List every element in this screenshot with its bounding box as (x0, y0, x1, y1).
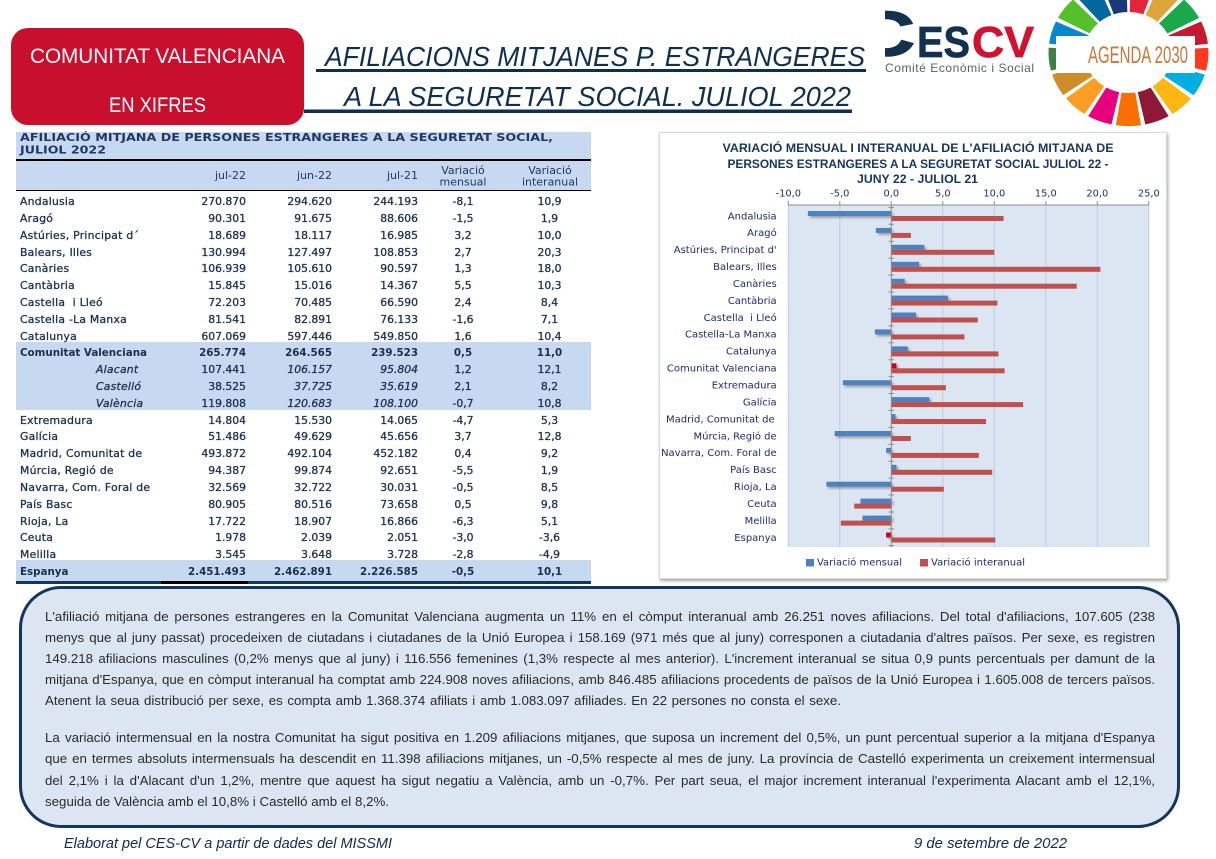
category labels: Balears, Illes (713, 262, 777, 273)
title (304, 41, 866, 113)
row: Cantàbria: 10,3 (537, 279, 562, 292)
row: València: 108.100 (373, 397, 418, 410)
category labels: Comunitat Valenciana (667, 364, 777, 375)
title: AFILIACIONS MITJANES P. ESTRANGERES (323, 41, 866, 72)
row: Galícia: 3,7 (454, 430, 472, 443)
row: València: València (96, 397, 143, 410)
row: País Basc: 9,8 (541, 498, 558, 511)
table title band: AFILIACIÓ MITJANA DE PERSONES ESTRANGERES A LA SEGURETAT SOCIAL, (20, 131, 553, 144)
row: Galícia: 12,8 (537, 430, 562, 443)
row: Galícia: Galícia (20, 430, 58, 443)
footer: date: 9 de setembre de 2022 (914, 835, 1068, 852)
row: Múrcia: 92.651 (380, 464, 418, 477)
row: Cantàbria: Cantàbria (20, 279, 75, 292)
category labels: Galícia (743, 396, 777, 408)
category labels: Navarra, Com. Foral de (661, 448, 777, 459)
row: Extremadura: 5,3 (541, 414, 558, 427)
row: Múrcia: 94.387 (208, 464, 246, 477)
legend: Variació mensual (817, 556, 902, 568)
row: Balears (20, 246, 562, 259)
row: Canàries: 1,3 (454, 262, 472, 275)
row: Ceuta: 1.978 (215, 531, 246, 544)
row: Extremadura: Extremadura (20, 414, 93, 427)
x axis labels: 5,0 (935, 188, 951, 200)
row: Galícia: 45.656 (380, 430, 418, 443)
row: Catalunya: 597.446 (287, 330, 332, 343)
row: Aragó: Aragó (20, 212, 53, 225)
row: Melilla: 3.648 (301, 548, 332, 561)
row: Canàries: 90.597 (380, 262, 418, 275)
row: Extremadura: 15.530 (294, 414, 332, 427)
row: Espanya (20, 566, 562, 578)
row: Cantàbria: 15.016 (294, 279, 332, 292)
row: Andalusia (20, 195, 562, 208)
category labels: Rioja, La (734, 482, 777, 493)
row: Madrid: 493.872 (201, 447, 246, 460)
logo: CES CV: CV (972, 18, 1035, 67)
row: Cantàbria (20, 279, 562, 292)
text: C (853, 0, 915, 70)
row: Galícia: 51.486 (208, 430, 246, 443)
row: Balears: 2,7 (454, 246, 472, 259)
category labels: Extremadura (712, 380, 777, 392)
row: València (96, 397, 562, 410)
row: Rioja: -6,3 (452, 515, 474, 528)
row: Alacant: 107.441 (201, 363, 246, 376)
text block: paragraph 1: Atenent la seua distribució per sexe, es compta amb 1.368.374 afiliats i amb 1.083.097 afiliades. En 22 persones no consta el sexe. (45, 693, 841, 708)
row: Navarra: Navarra, Com. Foral de (20, 481, 150, 494)
logo: Agenda 2030 wheel (1048, 0, 1208, 126)
row: Múrcia: 1,9 (541, 464, 558, 477)
row: Extremadura (20, 414, 558, 427)
row: Castella i Lleó: Castella i Lleó (20, 296, 103, 309)
row: Castella-La Manxa: 81.541 (208, 313, 246, 326)
table rows (20, 195, 562, 578)
row: Madrid: Madrid, Comunitat de (20, 447, 142, 460)
row: Madrid (20, 447, 558, 460)
row: Balears: 20,3 (537, 246, 562, 259)
row: Alacant (95, 363, 562, 376)
category labels: Madrid, Comunitat de (666, 414, 775, 425)
category labels: Ceuta (747, 499, 777, 510)
row: Astúries: 18.689 (208, 229, 246, 242)
row: Castella i Lleó (20, 296, 558, 309)
row: Cantàbria: 5,5 (454, 279, 472, 292)
text block: paragraph 2: del 2,1% i la d'Alacant d'un 1,2%, mentre que aquest ha sigut negatiu a València, amb un -0,7%. Per part seua, el major increment interanual l'experimenta Alacant amb el 12,1%, (45, 772, 1155, 788)
category labels (661, 211, 777, 544)
row: Balears: 127.497 (287, 246, 332, 259)
row: Alacant: 12,1 (537, 363, 562, 376)
chart title: VARIACIÓ MENSUAL I INTERANUAL DE L'AFILIACIÓ MITJANA DE (722, 141, 1114, 155)
row: Astúries (20, 229, 562, 242)
category labels: Espanya (734, 533, 777, 544)
row: Espanya: Espanya (20, 566, 68, 578)
row: Comunitat Valenciana: 239.523 (371, 347, 418, 359)
category labels: País Basc (730, 464, 777, 476)
text block: paragraph 2: que en termes absoluts intermensuals ha descendit en 11.398 afiliacions mitjanes, un -0,5% respecte al mes de juny. La província de Castelló experimenta un creixement intermensual (45, 751, 1155, 766)
row: València: 120.683 (287, 397, 332, 410)
panel: text commentary (19, 586, 1180, 828)
table header: mensual (440, 176, 486, 188)
row: Astúries: 3,2 (454, 229, 472, 242)
row: Canàries: 105.610 (287, 262, 332, 275)
row: Múrcia: Múrcia, Regió de (20, 464, 114, 477)
row: Catalunya: 1,6 (454, 330, 472, 343)
row: Canàries: 106.939 (201, 262, 246, 275)
table header: jun-22 (296, 169, 332, 182)
table header: jul-21 (386, 169, 418, 182)
row: Comunitat Valenciana (20, 347, 562, 359)
chart title: JUNY 22 - JULIOL 21 (857, 172, 978, 186)
row: Rioja: 17.722 (208, 515, 246, 528)
row: Espanya: 2.451.493 (188, 566, 246, 578)
row: Catalunya: Catalunya (20, 330, 77, 343)
row: València: -0,7 (452, 397, 474, 410)
row: Melilla: -2,8 (452, 548, 474, 561)
row: Alacant: 1,2 (454, 363, 472, 376)
row: Rioja: 5,1 (541, 515, 558, 528)
row: Andalusia: 294.620 (287, 195, 332, 208)
row: Castella i Lleó: 72.203 (208, 296, 246, 309)
row: Galícia (20, 430, 562, 443)
row: Melilla (20, 548, 560, 561)
row: Melilla: Melilla (20, 548, 56, 561)
x axis labels (776, 188, 1160, 200)
row: Catalunya (20, 330, 562, 343)
row: Aragó (20, 212, 558, 225)
row: Andalusia: 244.193 (373, 195, 418, 208)
row: Castelló: 38.525 (208, 380, 246, 393)
row: Navarra: 32.569 (208, 481, 246, 494)
row: Múrcia: -5,5 (452, 464, 474, 477)
row: Múrcia (20, 464, 558, 477)
row: Castella-La Manxa: -1,6 (452, 313, 474, 326)
x axis labels: 0,0 (884, 188, 899, 200)
row: Astúries: 16.985 (380, 229, 418, 242)
row: Espanya: 2.226.585 (360, 566, 418, 578)
row: Cantàbria: 14.367 (380, 279, 418, 292)
row: Castelló: 35.619 (380, 380, 418, 393)
row: Astúries: 18.117 (294, 229, 332, 242)
row: Castella i Lleó: 2,4 (454, 296, 472, 309)
row: Castella i Lleó: 8,4 (541, 296, 558, 309)
row: Extremadura: 14.065 (380, 414, 418, 427)
table header: jul-22 (214, 169, 246, 182)
category labels: Astúries, Principat d' (674, 244, 777, 256)
row: Castella-La Manxa: Castella -La Manxa (20, 313, 127, 326)
bars: variació mensual (808, 211, 948, 538)
row: Ceuta: 2.039 (301, 531, 332, 544)
category labels: Canàries (733, 278, 777, 290)
x axis labels: -10,0 (776, 188, 801, 200)
category labels: Melilla (745, 516, 777, 527)
row: Ceuta: -3,6 (539, 531, 560, 544)
row: València: 119.808 (201, 397, 246, 410)
row: Canàries: 18,0 (537, 262, 562, 275)
row: Navarra: -0,5 (452, 481, 474, 494)
row: Catalunya: 549.850 (373, 330, 418, 343)
footer: source: Elaborat pel CES-CV a partir de dades del MISSMI (64, 835, 392, 852)
x axis labels: 15,0 (1035, 188, 1057, 200)
chart title (722, 141, 1114, 186)
row: Navarra: 32.722 (294, 481, 332, 494)
row: Alacant: 106.157 (287, 363, 332, 376)
row: Comunitat Valenciana: 265.774 (199, 347, 246, 359)
panel: bar chart (659, 132, 1167, 579)
row: Comunitat Valenciana: 11,0 (537, 347, 562, 359)
row: Comunitat Valenciana: 264.565 (285, 347, 332, 359)
logo: CES CV: Comité Econòmic i Social (885, 61, 1034, 75)
text block: paragraph 2: seguida de València amb el 10,8% i Castelló amb el 8,2%. (45, 794, 389, 808)
legend: Variació interanual (931, 556, 1025, 568)
row: Castelló: 37.725 (294, 380, 332, 393)
row: Rioja: 16.866 (380, 515, 418, 528)
row: Rioja (20, 515, 558, 528)
row: Navarra: 30.031 (380, 481, 418, 494)
row: Navarra (20, 481, 558, 494)
row: Madrid: 0,4 (454, 447, 472, 460)
band: Comunitat Valenciana (16, 342, 591, 410)
table header: Variació (441, 164, 485, 177)
row: Melilla: 3.728 (387, 548, 418, 561)
text block: paragraph 1: 149.218 afiliacions masculines (0,2% menys que al juny) i 116.556 femenines (1,3% respecte al mes anterior). L'increment interanual se situa 0,9 punts percentuals per damunt de la (45, 651, 1155, 666)
x axis labels: 20,0 (1086, 188, 1108, 200)
band: Espanya (16, 560, 591, 581)
category labels: Aragó (747, 227, 777, 239)
text block: paragraph 1 (45, 609, 1155, 708)
badge: Comunitat Valenciana en xifres (11, 28, 304, 125)
chart plot area (788, 201, 1149, 547)
row: Balears: 108.853 (373, 246, 418, 259)
category labels: Múrcia, Regió de (693, 430, 777, 442)
x axis labels: 10,0 (983, 188, 1005, 200)
category labels: Catalunya (726, 347, 777, 358)
row: Balears: Balears, Illes (20, 246, 92, 259)
row: País Basc: 73.658 (380, 498, 418, 511)
x axis labels: -5,0 (830, 188, 849, 200)
row: Melilla: -4,9 (539, 548, 560, 561)
bars: variació interanual (841, 216, 1100, 542)
row: Andalusia: 10,9 (537, 195, 562, 208)
text block: paragraph 2: La variació intermensual en la nostra Comunitat ha sigut positiva en 1.209 afiliacions mitjanes, que suposa un increment del 0,5%, un punt percentual superior a la mitjana d'Espanya (45, 730, 1155, 745)
row: Ceuta: 2.051 (387, 531, 418, 544)
table header: interanual (522, 176, 578, 188)
row: País Basc: 80.905 (208, 498, 246, 511)
row: Espanya: 2.462.891 (274, 566, 332, 578)
row: Andalusia: Andalusia (20, 195, 75, 208)
text block: paragraph 1: mitjana d'Espanya, que en còmput interanual ha comptat amb 224.908 noves afiliacions, amb 846.485 afiliacions procedents de països de la Unió Europea i 1.605.008 de tercers països. (45, 672, 1155, 687)
panel: table (16, 131, 591, 584)
row: Catalunya: 10,4 (537, 330, 562, 343)
row: Extremadura: 14.804 (208, 414, 246, 427)
row: Andalusia: -8,1 (452, 195, 474, 208)
row: Cantàbria: 15.845 (208, 279, 246, 292)
row: Rioja: 18.907 (294, 515, 332, 528)
row: Castelló: 2,1 (454, 380, 472, 393)
row: Madrid: 452.182 (373, 447, 418, 460)
category labels: Castella-La Manxa (685, 330, 777, 341)
row: Castelló: Castelló (96, 380, 141, 393)
row: València: 10,8 (537, 397, 562, 410)
row: Canàries: Canàries (20, 262, 69, 275)
row: Comunitat Valenciana: 0,5 (454, 347, 472, 359)
logo: CES CV (885, 10, 1035, 75)
row: País Basc: 0,5 (454, 498, 472, 511)
row: Ceuta (20, 531, 560, 544)
row: Catalunya: 607.069 (201, 330, 246, 343)
row: Castelló: 8,2 (541, 380, 558, 393)
table bottom rule (16, 581, 591, 584)
row: Múrcia: 99.874 (294, 464, 332, 477)
row: Castella i Lleó: 66.590 (380, 296, 418, 309)
row: Astúries: 10,0 (537, 229, 562, 242)
row: Madrid: 9,2 (541, 447, 558, 460)
row: Aragó: 90.301 (208, 212, 246, 225)
category labels: Cantàbria (728, 295, 777, 307)
row: Aragó: 91.675 (294, 212, 332, 225)
row: Ceuta: -3,0 (452, 531, 474, 544)
row: Navarra: 8,5 (541, 481, 558, 494)
row: Espanya: 10,1 (537, 566, 562, 578)
row: País Basc: País Basc (20, 498, 73, 511)
x axis labels: 25,0 (1138, 188, 1160, 200)
row: Melilla: 3.545 (215, 548, 246, 561)
row: Andalusia: 270.870 (201, 195, 246, 208)
row: Aragó: -1,5 (452, 212, 474, 225)
table header: Variació (528, 164, 572, 177)
text block: paragraph 2 (45, 730, 1155, 808)
row: País Basc (20, 498, 558, 511)
row: Aragó: 1,9 (541, 212, 558, 225)
logo: CES CV: ES (917, 18, 970, 67)
row: Espanya: -0,5 (452, 566, 474, 578)
row: Alacant: 95.804 (380, 363, 418, 376)
category labels: Andalusia (728, 211, 777, 222)
table title band (16, 132, 591, 159)
legend (806, 556, 1025, 568)
table title band: JULIOL 2022 (19, 144, 106, 156)
title: A LA SEGURETAT SOCIAL. JULIOL 2022 (342, 81, 851, 112)
row: Extremadura: -4,7 (452, 414, 474, 427)
row: Galícia: 49.629 (294, 430, 332, 443)
badge: Comunitat Valenciana en xifres: COMUNITAT VALENCIANA (30, 45, 285, 68)
row: Madrid: 492.104 (287, 447, 332, 460)
row: Castella-La Manxa: 7,1 (541, 313, 558, 326)
row: Rioja: Rioja, La (20, 515, 68, 528)
row: Astúries: Astúries, Principat d´ (20, 229, 139, 242)
row: Aragó: 88.606 (380, 212, 418, 225)
table header (16, 159, 591, 191)
category labels: Castella i Lleó (704, 312, 777, 324)
row: País Basc: 80.516 (294, 498, 332, 511)
badge: Comunitat Valenciana en xifres: EN XIFRES (109, 94, 206, 117)
row: Castella-La Manxa (20, 313, 558, 326)
row: Castella-La Manxa: 76.133 (380, 313, 418, 326)
row: Castella-La Manxa: 82.891 (294, 313, 332, 326)
row: Balears: 130.994 (201, 246, 246, 259)
row: Comunitat Valenciana: Comunitat Valenciana (20, 347, 147, 359)
row: Ceuta: Ceuta (20, 531, 53, 544)
row: Castelló (96, 380, 558, 393)
row: Alacant: Alacant (96, 363, 138, 376)
row: Castella i Lleó: 70.485 (294, 296, 332, 309)
chart title: PERSONES ESTRANGERES A LA SEGURETAT SOCIAL JULIOL 22 - (728, 157, 1109, 171)
text block: paragraph 1: L'afiliació mitjana de persones estrangeres en la Comunitat Valenciana augmenta un 11% en el còmput interanual amb 26.251 noves afiliacions. Del total d'afiliacions, 107.605 (238 (45, 609, 1155, 624)
text block: paragraph 1: menys que al juny passat) procedeixen de ciutadans i ciutadanes de la Unió Europea i 158.169 (971 més que al juny) corresponen a ciutadania d'altres països. Per sexe, es registren (45, 630, 1155, 645)
row: Canàries (20, 262, 562, 275)
